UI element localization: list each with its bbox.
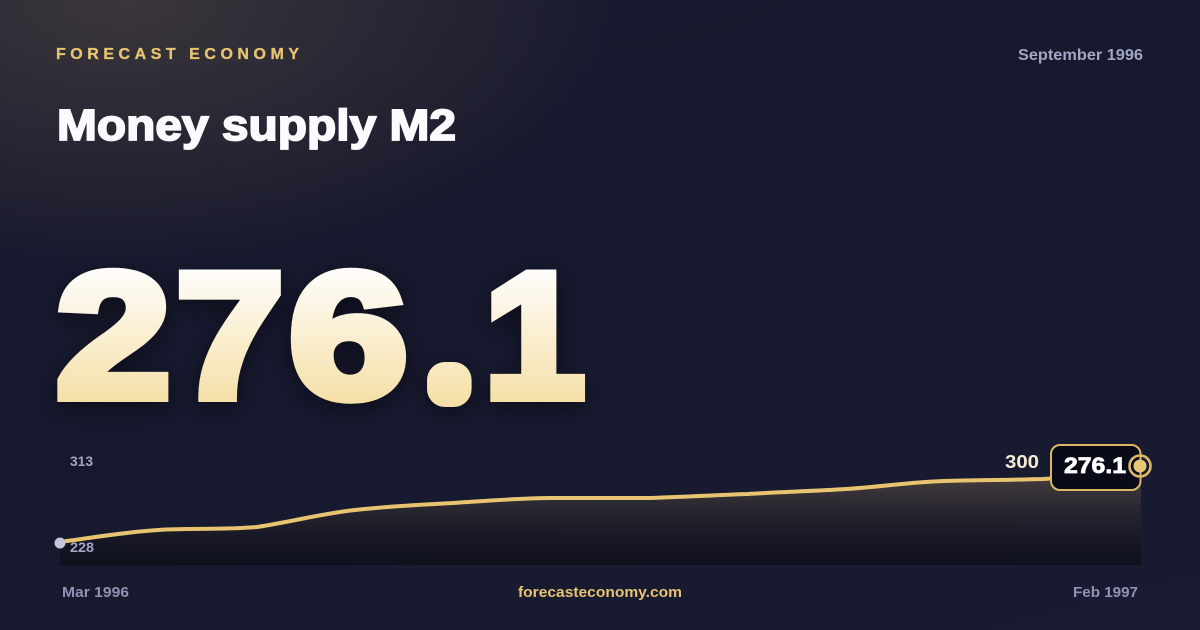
value callout: 276.1 — [1064, 453, 1126, 478]
date: September 1996 — [1018, 47, 1143, 64]
big number: 6 — [289, 236, 408, 435]
eyebrow: FORECAST ECONOMY: FORECAST ECONOMY — [56, 46, 299, 63]
axis max 313: 313 — [70, 454, 93, 469]
website: forecasteconomy.com — [518, 584, 682, 601]
end marker — [1130, 456, 1150, 476]
area shade — [60, 466, 1141, 565]
big number: 7 — [176, 236, 284, 435]
value callout — [1051, 445, 1140, 490]
start month: Mar 1996 — [62, 584, 129, 601]
big number: 2 — [56, 235, 171, 435]
axis min 228: 228 — [70, 540, 95, 555]
sparkline chart — [54, 466, 1141, 565]
big number — [56, 235, 585, 436]
label 300: 300 — [1005, 452, 1039, 472]
big number: . — [441, 335, 458, 402]
data line — [60, 466, 1141, 542]
start dot — [54, 538, 66, 548]
title: Money supply M2 — [57, 101, 456, 150]
area under line — [60, 466, 1141, 565]
big number: 1 — [484, 237, 585, 436]
end month: Feb 1997 — [1073, 584, 1138, 601]
